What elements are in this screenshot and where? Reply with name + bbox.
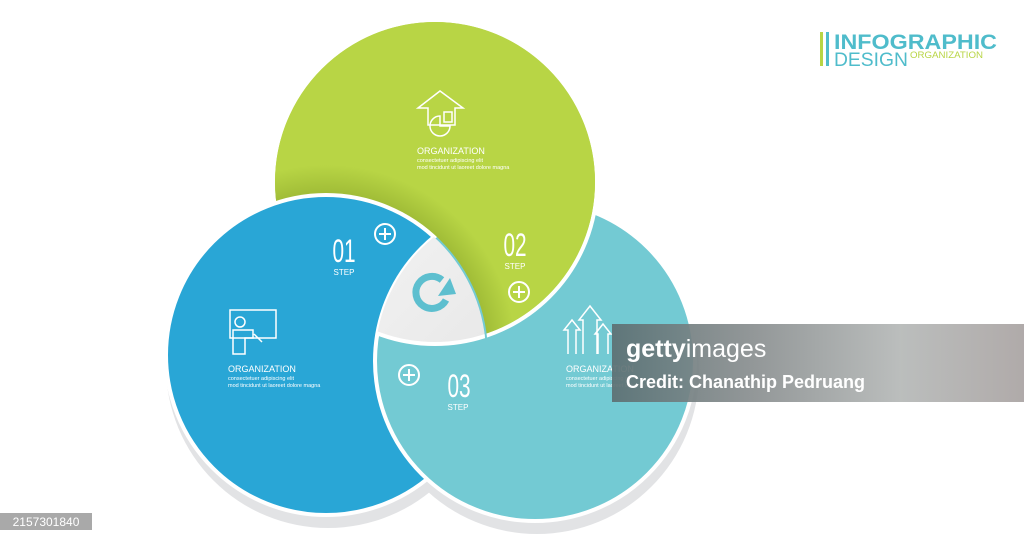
step 02 label: 02 — [503, 228, 527, 263]
text block 02: ORGANIZATION — [417, 146, 485, 156]
circle: teal step 03 — [375, 201, 695, 521]
text block 03 — [566, 364, 659, 389]
logo: infographic design — [820, 31, 997, 71]
plus badges — [375, 224, 529, 385]
watermark bar: gettyimages — [626, 335, 766, 363]
watermark bar — [612, 324, 1024, 402]
circle: green step 02 — [273, 20, 597, 344]
circle: blue step 01 — [166, 195, 486, 515]
logo: infographic design: INFOGRAPHIC — [834, 31, 997, 54]
step 03 label: STEP — [448, 403, 468, 412]
icon: cycle arrow — [416, 276, 456, 308]
text block 02: consectetuer adipiscing elit — [417, 158, 484, 164]
icon: growth arrows — [564, 306, 611, 354]
icon: presentation — [230, 310, 276, 354]
icon: house chart — [418, 91, 463, 136]
text block 02: mod tincidunt ut laoreet dolore magna — [417, 165, 510, 171]
logo: infographic design: ORGANIZATION — [910, 50, 983, 60]
step 01 label: 01 — [332, 234, 356, 269]
text block 03: mod tincidunt ut laoreet dolore magna — [566, 383, 659, 389]
text block 03: consectetuer adipiscing elit — [566, 376, 633, 382]
center intersection — [378, 237, 485, 346]
step 01 label: STEP — [334, 268, 354, 277]
text block 01 — [228, 364, 321, 389]
text block 03: ORGANIZATION — [566, 364, 634, 374]
text block 01: mod tincidunt ut laoreet dolore magna — [228, 383, 321, 389]
step 03 label: 03 — [447, 369, 471, 404]
text block 01: ORGANIZATION — [228, 364, 296, 374]
text block 02 — [417, 146, 510, 171]
logo: infographic design: DESIGN — [834, 50, 908, 71]
image id label — [0, 513, 92, 530]
image id label: 2157301840 — [13, 515, 80, 529]
text block 01: consectetuer adipiscing elit — [228, 376, 295, 382]
step 02 label: STEP — [505, 262, 525, 271]
watermark bar: Credit: Chanathip Pedruang — [626, 372, 865, 392]
shadows — [166, 204, 699, 534]
